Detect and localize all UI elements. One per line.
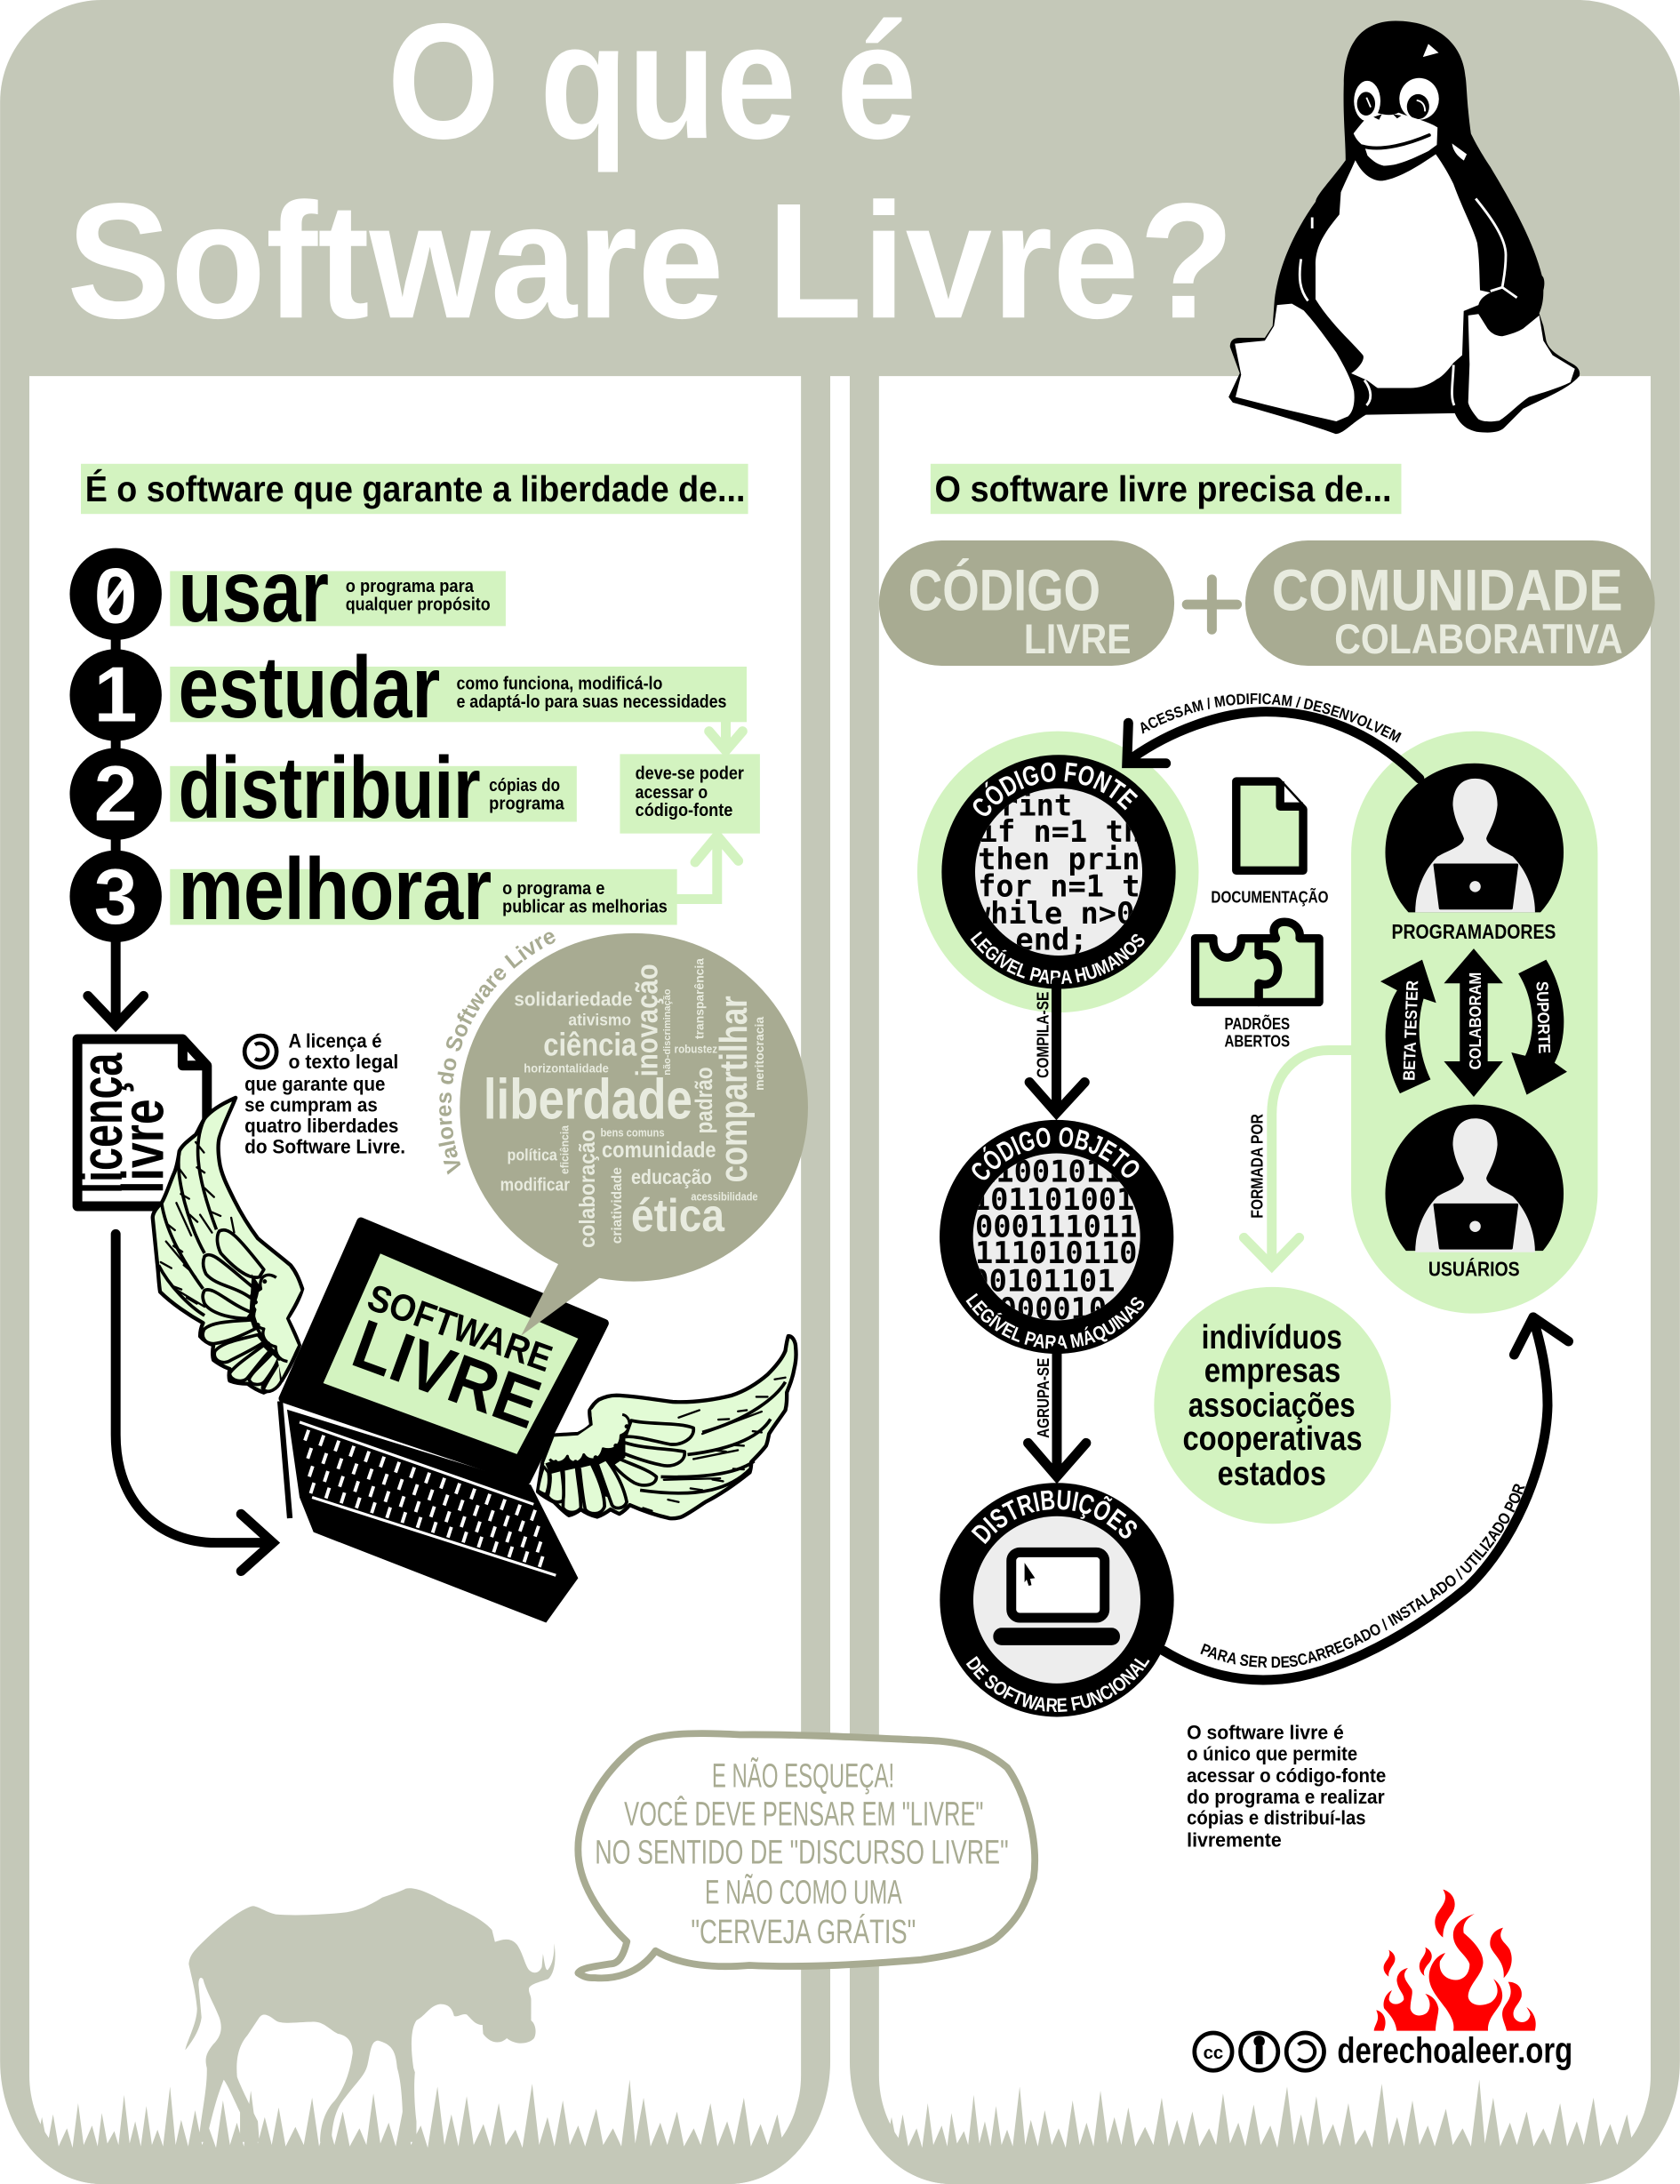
step 2: distribuir: programa [489, 794, 564, 813]
wing lower feathers [597, 1459, 627, 1508]
node: distribuições: DE SOFTWARE FUNCIONAL [962, 1651, 1154, 1716]
step 1: estudar: e adaptá-lo para suas necessidades [456, 692, 726, 712]
text: license description: o texto legal [288, 1051, 398, 1073]
word cloud: ciência [543, 1027, 637, 1063]
word cloud: não-discriminação [662, 988, 673, 1076]
arrow: agrupa-se: AGRUPA-SE [1035, 1358, 1052, 1438]
arrow: programadores to código fonte: ACESSAM / MODIFICAM / DESENVOLVEM [1140, 693, 1402, 743]
binary code: 111010110 [975, 1236, 1137, 1270]
panel: left [29, 376, 801, 2172]
step 3: melhorar: melhorar [179, 840, 492, 938]
word cloud: compartilhar [712, 996, 756, 1182]
binary code [977, 1159, 1136, 1319]
pill: código livre: LIVRE [1024, 615, 1131, 662]
text: software livre note: livremente [1187, 1828, 1282, 1851]
arrow: programadores to código fonte [1127, 690, 1420, 779]
laptop screen [324, 1253, 578, 1454]
text: license description: quatro liberdades [244, 1115, 398, 1137]
text: software livre note: acessar o código-fonte [1187, 1764, 1386, 1787]
wing shoulder [544, 1398, 629, 1463]
step 3: melhorar: publicar as melhorias [502, 897, 668, 916]
icon: puzzle padrões abertos: ABERTOS [1224, 1032, 1290, 1051]
text: license description: A licença é [288, 1029, 381, 1052]
arrow: beta tester: BETA TESTER [1399, 980, 1421, 1081]
text: software livre note: do programa e realizar [1187, 1786, 1385, 1808]
icon: laptop [280, 1221, 604, 1623]
arrow: agrupa-se [1028, 1348, 1086, 1476]
step 3: melhorar: 3 [94, 853, 138, 940]
icon: documentação: DOCUMENTAÇÃO [1211, 887, 1329, 906]
speech bubble: free speech: E NÃO ESQUEÇA! [712, 1756, 894, 1794]
node: código objeto [940, 1120, 1173, 1354]
icon: license document [68, 1039, 207, 1206]
pill: código livre [879, 540, 1174, 666]
tux right foot [1468, 314, 1575, 421]
tux left foot [1235, 304, 1355, 421]
text: license description: que garante que [244, 1073, 385, 1095]
pill: comunidade colaborativa: COLABORATIVA [1334, 615, 1623, 662]
arrow: colaboram [1444, 948, 1503, 1097]
subtitle: left: É o software que garante a liberdade de... [85, 468, 745, 509]
tux highlights [1423, 44, 1467, 161]
icon: puzzle padrões abertos: PADRÕES [1224, 1014, 1290, 1033]
word cloud: criatividade [610, 1167, 625, 1244]
tux belly [1316, 154, 1491, 388]
step 1: estudar: estudar [179, 638, 440, 736]
node: distribuições [940, 1483, 1174, 1716]
node: programadores [1385, 764, 1564, 943]
wing shoulder [253, 1276, 300, 1378]
circle: community members [1154, 1287, 1391, 1524]
callout: código-fonte access: acessar o [636, 783, 708, 803]
text: license description: do Software Livre. [244, 1135, 405, 1157]
step 0: usar: 0 [94, 552, 138, 639]
text: license description: se cumpram as [244, 1093, 378, 1116]
word cloud: modificar [500, 1176, 570, 1196]
arrow: suporte: SUPORTE [1532, 980, 1554, 1054]
text: software livre note: cópias e distribuí-las [1187, 1807, 1366, 1829]
word cloud: acessibilidade [691, 1191, 758, 1204]
node: usuários [1385, 1105, 1564, 1283]
word cloud: bens comuns [600, 1127, 665, 1140]
panel: community pill background [1351, 732, 1597, 1314]
word cloud: comunidade [602, 1138, 716, 1163]
arrow: distribuições to usuários: PARA SER DESCARREGADO / INSTALADO / UTILIZADO POR [1198, 1481, 1529, 1671]
circle: community members: estados [1218, 1454, 1326, 1492]
source code: then prin [978, 842, 1140, 876]
freedom steps line [113, 599, 119, 1024]
node: código fonte [917, 731, 1198, 1012]
callout: código-fonte access: deve-se poder [636, 764, 744, 784]
laptop screen text: SOFTWARE [363, 1276, 557, 1380]
icon: left wing [153, 1098, 302, 1393]
circle: community members: empresas [1204, 1351, 1340, 1388]
pill: código livre: CÓDIGO [908, 556, 1100, 622]
wing coverts [625, 1420, 693, 1444]
word cloud: padrão [691, 1067, 717, 1134]
text: software livre note [1187, 1722, 1386, 1851]
speech bubble: free speech: VOCÊ DEVE PENSAR EM "LIVRE" [624, 1796, 983, 1833]
speech bubble: free speech: NO SENTIDO DE "DISCURSO LIVRE" [595, 1834, 1009, 1871]
step 1: estudar [69, 638, 747, 741]
source code: end; [1015, 923, 1088, 957]
text: derechoaleer.org: derechoaleer.org [1337, 2030, 1572, 2071]
icon: creative commons badges: cc [1204, 2044, 1223, 2063]
circle: community members: indivíduos [1202, 1318, 1342, 1356]
word cloud: inovação [631, 964, 665, 1076]
binary code: 00101101 [971, 1264, 1115, 1299]
subtitle: right: O software livre precisa de... [935, 468, 1392, 509]
arrow: melhorar to callout [677, 836, 739, 899]
callout: código-fonte access [620, 754, 760, 834]
callout: código-fonte access: código-fonte [636, 801, 732, 820]
word cloud: educação [631, 1165, 712, 1188]
node: programadores: PROGRAMADORES [1392, 920, 1556, 943]
grass: both panels [29, 2079, 1651, 2184]
laptop base [287, 1410, 578, 1623]
arrow: suporte [1511, 960, 1567, 1095]
title: Software Livre? [67, 170, 1234, 353]
node: código objeto: LEGÍVEL PARA MÁQUINAS [962, 1290, 1149, 1354]
curved label: Valores do Software Livre [437, 932, 556, 1175]
arrow: compila-se [1029, 982, 1084, 1113]
text: license description [244, 1029, 405, 1157]
speech bubble: free speech [578, 1733, 1035, 1978]
arrow: formada por [1244, 1050, 1351, 1266]
wing coverts [217, 1230, 264, 1277]
panel: right [879, 376, 1651, 2172]
step 3: melhorar [69, 840, 677, 942]
word cloud: ética [631, 1189, 725, 1241]
arrow: license to laptop [116, 1234, 273, 1572]
step 0: usar [69, 542, 506, 640]
circle: community members: cooperativas [1182, 1420, 1363, 1457]
icon: gnu silhouette [185, 1888, 556, 2142]
icon: right wing [538, 1336, 796, 1518]
icon: license document: livre [109, 1099, 175, 1194]
word cloud: transparência [692, 958, 706, 1039]
icon: flame logo [1374, 1890, 1536, 2031]
word cloud [484, 958, 766, 1248]
source code: print [982, 788, 1072, 822]
node: distribuições: DISTRIBUIÇÕES [966, 1484, 1143, 1549]
step 2: distribuir: distribuir [179, 739, 481, 836]
word cloud: horizontalidade [524, 1061, 609, 1076]
speech bubble: free speech: E NÃO COMO UMA [705, 1873, 902, 1910]
icon: laptop: LIVRE [343, 1304, 550, 1444]
icon: license document: licença [68, 1052, 134, 1194]
arrow: steps to license [88, 996, 144, 1025]
laptop screen bezel [283, 1221, 604, 1481]
icon: puzzle padrões abertos [1196, 922, 1319, 1051]
binary code: 101101001 [972, 1182, 1134, 1217]
step 0: usar: qualquer propósito [346, 595, 491, 614]
arrow: formada por: FORMADA POR [1248, 1114, 1267, 1219]
icon: documentação [1211, 781, 1329, 906]
speech bubble: free speech: "CERVEJA GRÁTIS" [691, 1913, 916, 1950]
arrow: compila-se: COMPILA-SE [1034, 992, 1052, 1078]
arrow: colaboram: COLABORAM [1466, 972, 1484, 1069]
icon: copyleft [244, 1036, 276, 1068]
binary code: 11001011 [978, 1155, 1122, 1189]
arrow: estudar to callout [709, 722, 742, 751]
source code: for n=1 t [978, 868, 1140, 903]
binary code: 0000010 [980, 1292, 1107, 1326]
binary code: 000111011 [975, 1209, 1137, 1244]
icon: creative commons badges [1195, 2033, 1324, 2070]
source code: while n>0 [972, 896, 1134, 931]
step 1: estudar: como funciona, modificá-lo [456, 675, 662, 694]
word cloud: meritocracia [752, 1017, 766, 1091]
pill: comunidade colaborativa: COMUNIDADE [1272, 556, 1623, 622]
step 1: estudar: 1 [94, 652, 138, 739]
word cloud: liberdade [484, 1067, 692, 1131]
arrow: distribuições to usuários [1164, 1317, 1569, 1680]
word cloud: ativismo [568, 1010, 631, 1028]
word cloud: eficiência [558, 1124, 571, 1174]
pill: comunidade colaborativa [1245, 540, 1655, 666]
text: software livre note: o único que permite [1187, 1743, 1357, 1765]
word cloud: colaboração [575, 1130, 600, 1248]
icon: computer [993, 1552, 1120, 1645]
step 3: melhorar: o programa e [502, 879, 604, 899]
laptop keyboard [300, 1398, 556, 1575]
tux eyes [1354, 81, 1380, 121]
wing primary feathers [640, 1382, 786, 1493]
step 2: distribuir: 2 [94, 750, 138, 837]
source code [980, 793, 1138, 954]
step 2: distribuir: cópias do [489, 776, 560, 796]
tux beak [1354, 113, 1437, 165]
icon: plus [1187, 580, 1237, 629]
arrow: beta tester [1380, 960, 1436, 1093]
title [67, 0, 1234, 353]
step 0: usar: usar [179, 542, 329, 640]
word cloud: robustez [675, 1044, 717, 1056]
text: software livre note: O software livre é [1187, 1722, 1344, 1744]
word cloud: solidariedade [514, 988, 633, 1010]
node: usuários: USUÁRIOS [1428, 1256, 1520, 1280]
icon: tux penguin [1228, 21, 1580, 434]
speech bubble: word cloud [432, 924, 808, 1336]
wing primary feathers [158, 1118, 216, 1316]
source code: if n=1 th [980, 814, 1141, 849]
node: código objeto: CÓDIGO OBJETO [964, 1121, 1147, 1188]
wing lower feathers [203, 1320, 255, 1344]
word cloud: política [507, 1145, 557, 1164]
circle: community members: associações [1188, 1387, 1356, 1424]
step 0: usar: o programa para [346, 577, 474, 596]
node: código fonte: CÓDIGO FONTE [972, 763, 1138, 816]
node: código fonte: LEGÍVEL PARA HUMANOS [971, 932, 1145, 985]
